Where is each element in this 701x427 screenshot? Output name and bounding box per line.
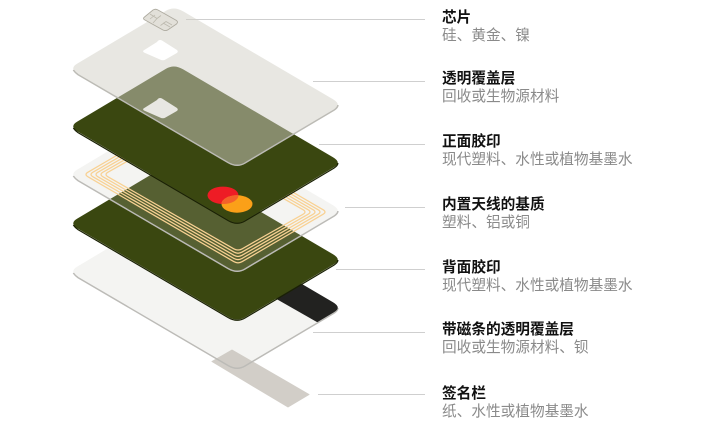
signature strip	[212, 350, 309, 407]
label: back print: 现代塑料、水性或植物基墨水	[442, 278, 633, 294]
chip window	[143, 40, 178, 60]
leader lines	[186, 20, 425, 394]
layer: antenna substrate	[73, 115, 338, 271]
logo: two overlapping circles	[208, 187, 252, 213]
label: chip	[442, 9, 530, 44]
label: antenna substrate	[442, 196, 545, 231]
label: overlay with magnetic stripe: 回收或生物源材料、钡	[442, 340, 589, 356]
label: back print: 背面胶印	[442, 260, 501, 276]
label: overlay with magnetic stripe	[442, 321, 589, 356]
layer: transparent overlay with magnetic stripe	[72, 248, 339, 369]
exploded card diagram	[72, 8, 425, 408]
icon: chip	[144, 9, 178, 31]
layer: transparent overlay	[73, 9, 338, 165]
label: signature strip: 纸、水性或植物基墨水	[442, 404, 589, 420]
label: back print	[442, 259, 633, 294]
label: front print	[442, 133, 633, 168]
label: front print: 正面胶印	[442, 134, 501, 150]
label: chip: 硅、黄金、镍	[442, 28, 530, 44]
label: transparent overlay: 回收或生物源材料	[442, 89, 559, 105]
label: signature strip: 签名栏	[442, 386, 486, 402]
label: antenna substrate: 塑料、铝或铜	[442, 215, 530, 231]
layer: front offset print	[73, 67, 338, 223]
label: overlay with magnetic stripe: 带磁条的透明覆盖层	[442, 322, 574, 338]
label: chip: 芯片	[442, 10, 471, 26]
label: antenna substrate: 内置天线的基质	[442, 197, 545, 213]
label: transparent overlay: 透明覆盖层	[442, 71, 515, 87]
antenna coil	[86, 122, 325, 263]
layer: back offset print	[73, 164, 338, 320]
chip window in print	[143, 98, 178, 118]
magnetic stripe	[276, 284, 338, 322]
label: signature strip	[442, 385, 589, 420]
label: transparent overlay	[442, 70, 559, 105]
label: front print: 现代塑料、水性或植物基墨水	[442, 152, 633, 168]
